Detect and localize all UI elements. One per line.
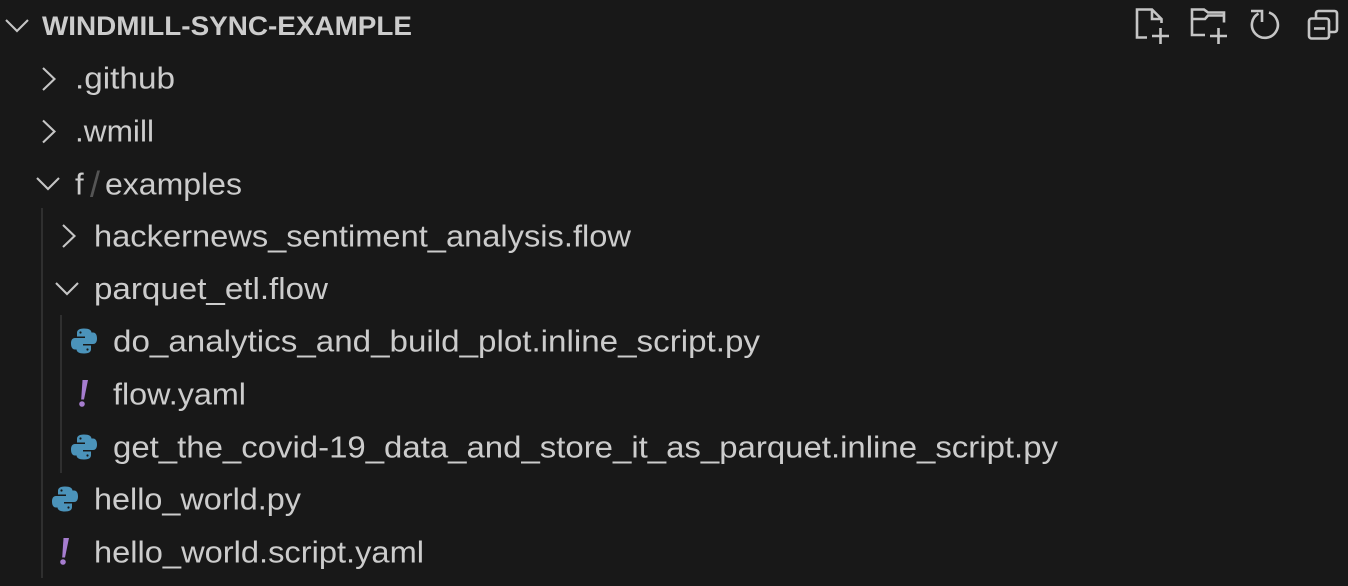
icon: collapse all — [1309, 11, 1337, 38]
icon: python — [52, 486, 78, 512]
label — [75, 164, 242, 204]
label: parquet_etl.flow — [94, 271, 329, 306]
row: hello_world.py — [52, 482, 302, 516]
icon: yaml exclamation — [60, 538, 69, 565]
icon: new file — [1137, 10, 1169, 44]
indent guide: parquet_etl.flow — [60, 315, 62, 473]
label: hello_world.py — [94, 482, 302, 516]
row: do_analytics_and_build_plot.inline_script.py — [71, 324, 761, 358]
row: hackernews_sentiment_analysis.flow — [63, 218, 632, 254]
indent guide: f/examples — [41, 208, 43, 578]
icon: collapsed chevron — [43, 120, 54, 142]
label: do_analytics_and_build_plot.inline_script.py — [113, 324, 761, 358]
icon: python — [71, 434, 97, 460]
icon: collapsed chevron — [63, 225, 74, 247]
label: examples — [105, 166, 242, 202]
label: .wmill — [75, 114, 154, 148]
label: .github — [75, 60, 175, 96]
icon: collapsed chevron — [43, 68, 54, 90]
row: .wmill — [43, 114, 154, 148]
icon: python — [71, 328, 97, 354]
label: hello_world.script.yaml — [94, 534, 424, 570]
icon: expanded chevron — [56, 283, 78, 294]
row: get_the_covid-19_data_and_store_it_as_parquet.inline_script.py — [71, 430, 1059, 464]
row: .github — [43, 60, 175, 96]
row: flow.yaml — [79, 376, 246, 412]
icon: yaml exclamation — [79, 380, 88, 407]
label: / — [90, 164, 100, 204]
icon: refresh — [1251, 11, 1278, 38]
label: f — [75, 166, 84, 202]
toolbar icons — [1137, 10, 1337, 44]
row: hello_world.script.yaml — [60, 534, 424, 570]
header row: project title — [6, 11, 412, 41]
row: parquet_etl.flow — [56, 271, 329, 306]
title: WINDMILL-SYNC-EXAMPLE — [42, 11, 412, 41]
label: flow.yaml — [113, 376, 246, 412]
label: hackernews_sentiment_analysis.flow — [94, 218, 632, 254]
label: get_the_covid-19_data_and_store_it_as_parquet.inline_script.py — [113, 430, 1059, 464]
icon: expanded chevron — [6, 20, 28, 31]
icon: expanded chevron — [37, 178, 59, 189]
row: f/examples — [37, 164, 242, 204]
icon: new folder — [1192, 10, 1227, 44]
